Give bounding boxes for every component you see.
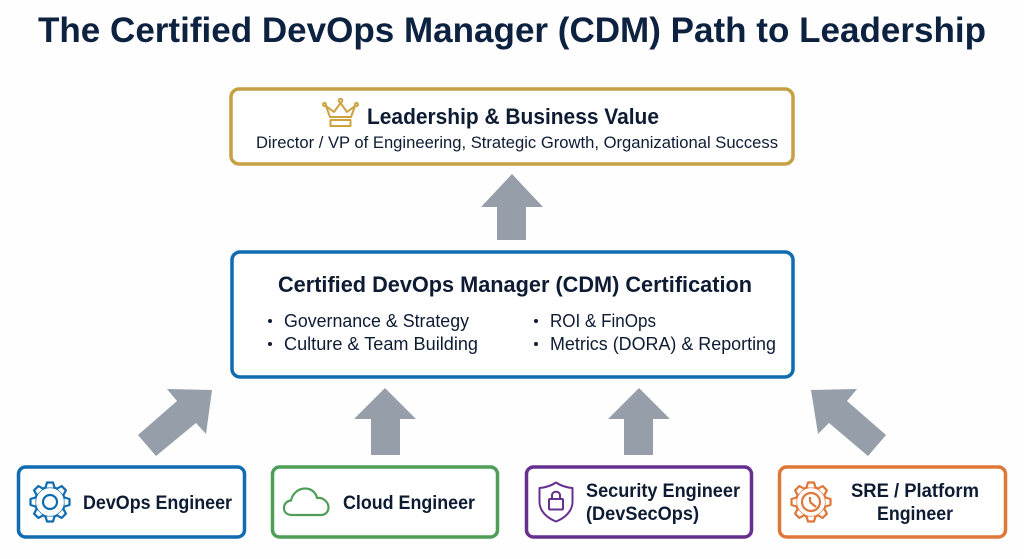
label: sre platform engineer: Engineer: [877, 504, 954, 525]
list: left skills: Governance & Strategy: [284, 311, 469, 331]
list: right skills: Metrics (DORA) & Reporting: [550, 334, 776, 354]
label: cloud engineer: Cloud Engineer: [343, 493, 476, 514]
list: left skills: [268, 311, 478, 354]
list: right skills: ROI & FinOps: [550, 311, 656, 331]
arrow: security up: [608, 388, 670, 455]
label: devops engineer: DevOps Engineer: [83, 493, 233, 514]
icon: crown: [323, 99, 358, 126]
list: right skills: [534, 311, 776, 354]
text: leadership roles: Director / VP of Engineering, Strategic Growth, Organizational Success: [256, 133, 778, 152]
label: sre platform engineer: SRE / Platform: [851, 481, 979, 502]
arrow: cloud up: [354, 388, 416, 455]
panel: security engineer: [526, 467, 752, 537]
panel: cloud engineer: [272, 467, 498, 537]
title: The Certified DevOps Manager (CDM) Path to Leadership: [38, 11, 986, 50]
heading: certification: Certified DevOps Manager (CDM) Certification: [278, 272, 752, 297]
arrow: sre diagonal: [811, 389, 886, 456]
panel: sre platform engineer: [780, 467, 1006, 537]
list: left skills: Culture & Team Building: [284, 334, 478, 354]
label: security engineer: [586, 481, 741, 525]
icon: gear: [30, 482, 70, 522]
icon: shield with lock: [540, 482, 572, 522]
icon: cloud: [284, 488, 328, 515]
label: sre platform engineer: [851, 481, 979, 525]
arrow: devops diagonal: [138, 389, 212, 456]
label: security engineer: (DevSecOps): [586, 504, 699, 525]
arrow: certification to leadership: [481, 174, 543, 240]
heading: leadership: Leadership & Business Value: [367, 104, 659, 129]
panel: leadership and business value: [231, 89, 793, 164]
panel: devops engineer: [18, 467, 244, 537]
label: security engineer: Security Engineer: [586, 481, 741, 502]
icon: gear with gauge: [792, 482, 830, 522]
panel: CDM certification: [232, 252, 793, 377]
